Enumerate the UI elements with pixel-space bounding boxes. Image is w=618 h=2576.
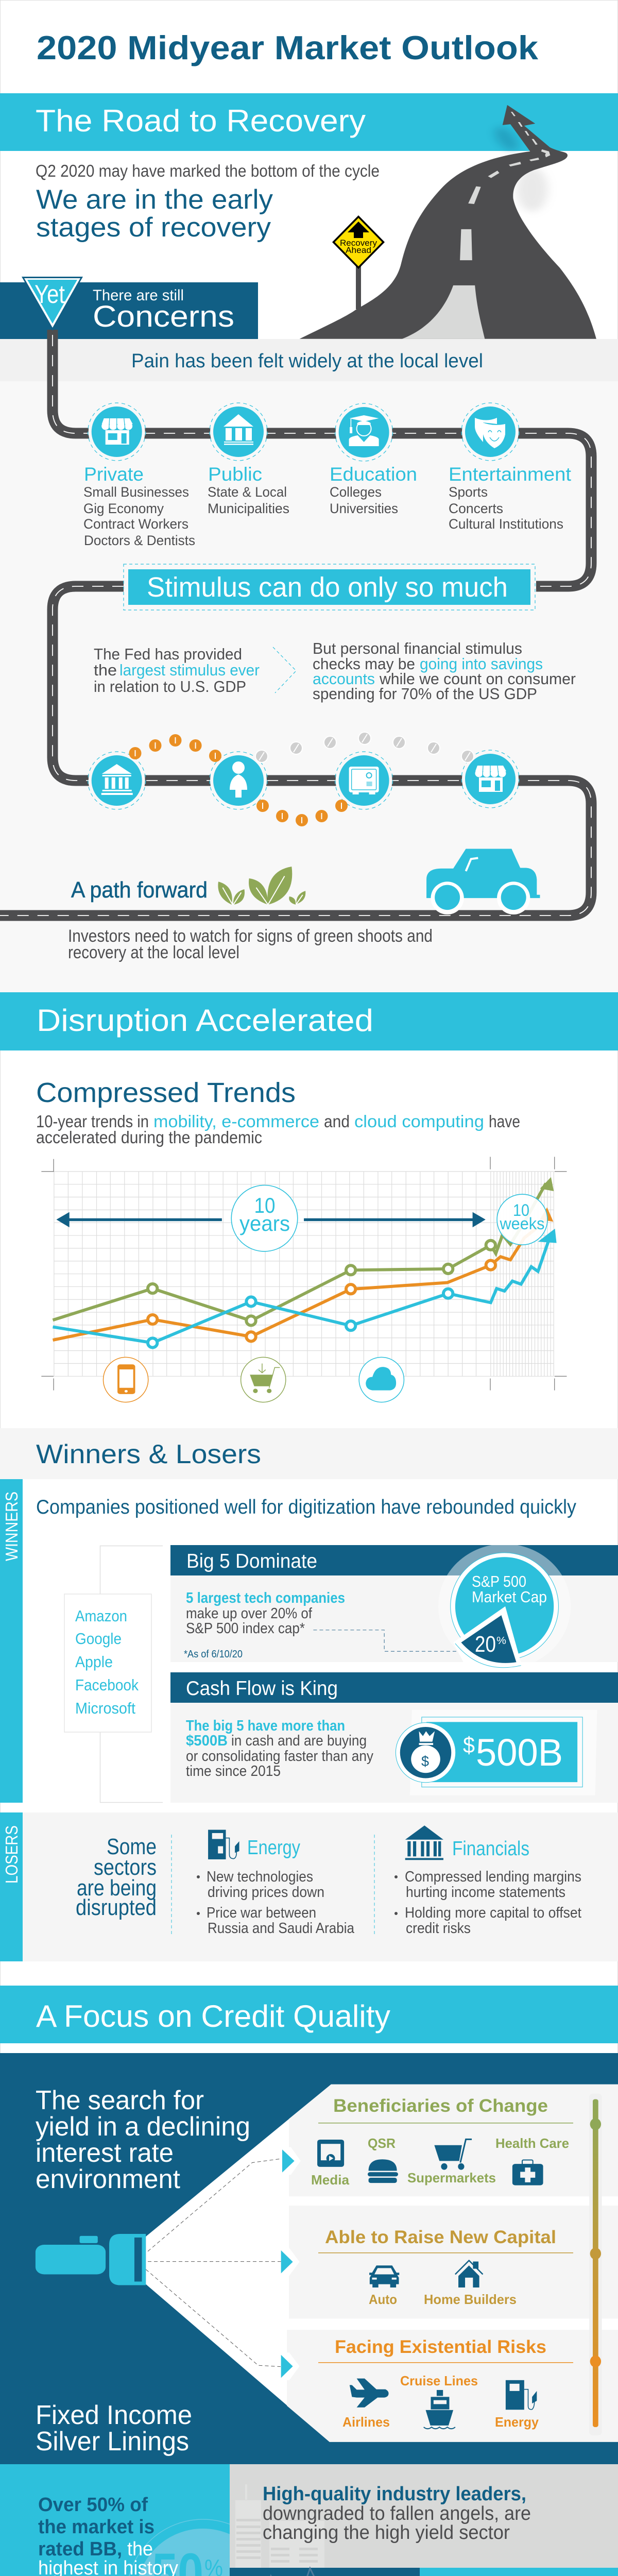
panel: big five company list: Google bbox=[75, 1630, 122, 1648]
icon: Recovery Ahead road sign: Ahead bbox=[346, 245, 371, 255]
heading: fixed income silver linings: Fixed Income bbox=[36, 2400, 192, 2430]
text: financials losers: Compressed lending margins bbox=[405, 1869, 581, 1885]
text: financials losers: credit risks bbox=[406, 1920, 471, 1937]
icon: green shoots bbox=[218, 867, 305, 905]
panel: Cash Flow is King bbox=[170, 1672, 618, 1803]
banner: stimulus can do only so much: Stimulus can do only so much bbox=[147, 572, 508, 603]
panel: treasury yields bbox=[230, 2568, 420, 2576]
illustration: road with arrow bbox=[300, 105, 596, 339]
panel: Big 5 Dominate: 5 largest tech companies bbox=[186, 1590, 345, 1606]
icons: media, burger, cart, health care bbox=[317, 2139, 543, 2185]
heading: a path forward: A path forward bbox=[71, 877, 208, 903]
icon: orange coins person to safe bbox=[256, 800, 348, 826]
heading: early stages of recovery: We are in the early bbox=[36, 184, 273, 215]
text: search for yield: interest rate bbox=[36, 2138, 174, 2168]
icon: mobility phone bbox=[104, 1357, 148, 1402]
panel text: facing existential risks: Cruise Lines bbox=[400, 2373, 478, 2388]
panel: over 50% rated BB: the bbox=[127, 2538, 153, 2560]
text: 10-year trends: cloud computing bbox=[354, 1112, 484, 1131]
text: investors need to watch: Investors need to watch for signs of green shoots and bbox=[68, 926, 433, 946]
chart: S&P 500 market cap pie bbox=[313, 1544, 571, 1669]
icon: bank circle bbox=[88, 752, 146, 809]
panel text: facing existential risks: Energy bbox=[495, 2414, 539, 2430]
icon: private store bbox=[88, 403, 146, 461]
callout: $500B with money bag: 500B bbox=[476, 1731, 563, 1774]
text: Entertainment: Concerts bbox=[449, 501, 503, 516]
text: 10-year trends: mobility, e-commerce bbox=[153, 1112, 319, 1131]
icon: gray crossed coins person to store bbox=[255, 732, 474, 762]
panel: high-quality industry leaders: changing the high yield sector bbox=[263, 2522, 510, 2544]
text: Private: Private bbox=[84, 464, 144, 485]
icon: education graduate bbox=[335, 403, 393, 461]
panel: falling dollar bbox=[420, 2568, 618, 2576]
panel: over 50% rated BB: rated BB, bbox=[38, 2538, 122, 2560]
text: personal financial stimulus: while we count on consumer bbox=[379, 670, 576, 688]
text: financials losers: Holding more capital to offset bbox=[405, 1905, 581, 1921]
text: Public bbox=[208, 464, 289, 516]
arrows: beam chevrons bbox=[281, 2147, 301, 2380]
heading: early stages of recovery: stages of recovery bbox=[36, 212, 271, 243]
text: some sectors are being disrupted: sectors bbox=[94, 1855, 157, 1880]
section band: A Focus on Credit Quality bbox=[0, 1986, 618, 2043]
chart series: orange bbox=[53, 1208, 553, 1340]
panel: Cash Flow is King: or consolidating faster than any bbox=[186, 1748, 373, 1765]
text: Private: Gig Economy bbox=[83, 501, 164, 516]
callout: $500B with money bag: $ bbox=[463, 1733, 475, 1758]
section band: The Road to Recovery: The Road to Recovery bbox=[36, 104, 366, 138]
panel background: Winners & Losers head bbox=[0, 1428, 618, 1479]
text: energy losers: New technologies bbox=[207, 1869, 313, 1885]
tab: LOSERS bbox=[0, 1812, 23, 1961]
panel: Big 5 Dominate: *As of 6/10/20 bbox=[184, 1649, 243, 1660]
label: 10 weeks: 10 bbox=[513, 1201, 529, 1219]
chart: S&P 500 market cap pie: Market Cap bbox=[472, 1588, 547, 1606]
panel: Big 5 Dominate: make up over 20% of bbox=[186, 1605, 313, 1622]
text: some sectors are being disrupted bbox=[76, 1834, 157, 1920]
section band: The Road to Recovery bbox=[0, 93, 618, 151]
text: the Fed stimulus: largest stimulus ever bbox=[119, 661, 260, 679]
text: Public: Public bbox=[208, 464, 262, 485]
text: search for yield bbox=[36, 2086, 250, 2194]
text: 10-year trends: and bbox=[324, 1112, 350, 1131]
panel: Big 5 Dominate: S&P 500 index cap* bbox=[186, 1620, 305, 1637]
text: Private: Small Businesses bbox=[83, 484, 189, 500]
banner: stimulus can do only so much bbox=[124, 564, 535, 610]
icon: flashlight bbox=[36, 2234, 146, 2285]
panel: big five company list: Amazon bbox=[75, 1607, 127, 1625]
icon: Recovery Ahead road sign bbox=[332, 215, 385, 309]
icon: entertainment masks bbox=[461, 403, 519, 461]
heading: Compressed Trends: Compressed Trends bbox=[36, 1077, 296, 1108]
text: some sectors are being disrupted: disrupted bbox=[76, 1895, 157, 1920]
text: personal financial stimulus bbox=[313, 639, 576, 703]
text: the Fed stimulus bbox=[94, 645, 260, 696]
panel: Cash Flow is King: The big 5 have more than bbox=[186, 1718, 345, 1734]
panel: losers background bbox=[0, 1812, 618, 1961]
title: 2020 Midyear Market Outlook bbox=[37, 29, 539, 66]
arrow: ten years span bbox=[56, 1212, 486, 1227]
text: search for yield: yield in a declining bbox=[36, 2112, 250, 2142]
text: pain felt widely: Pain has been felt widely at the local level bbox=[131, 350, 483, 372]
panel text: beneficiaries of change: Media bbox=[311, 2172, 350, 2188]
panel text: able to raise new capital: Able to Raise New Capital bbox=[325, 2227, 556, 2247]
text: energy losers bbox=[197, 1837, 355, 1937]
tab: WINNERS bbox=[0, 1479, 23, 1803]
panel text: beneficiaries of change: QSR bbox=[368, 2136, 396, 2151]
text: financials losers: Financials bbox=[452, 1838, 529, 1860]
text: Education: Education bbox=[330, 464, 417, 485]
text: energy losers: driving prices down bbox=[208, 1884, 324, 1901]
icon: store circle bbox=[461, 750, 519, 808]
panel text: beneficiaries of change: Supermarkets bbox=[407, 2170, 496, 2185]
text: some sectors are being disrupted: Some bbox=[107, 1834, 157, 1859]
text: energy losers: Price war between bbox=[207, 1905, 316, 1921]
heading: Winners & Losers: Winners & Losers bbox=[36, 1439, 261, 1469]
panel: over 50% rated BB: Over 50% of bbox=[38, 2494, 148, 2516]
text: some sectors are being disrupted: are being bbox=[77, 1875, 157, 1901]
label: 10 weeks: weeks bbox=[500, 1214, 545, 1233]
heading: fixed income silver linings bbox=[36, 2400, 192, 2456]
road: lower winding road bbox=[0, 586, 591, 916]
panel: Big 5 Dominate bbox=[170, 1545, 618, 1662]
chart series: green bbox=[53, 1177, 554, 1320]
text: 10-year trends bbox=[36, 1112, 520, 1147]
chart: S&P 500 market cap pie: S&P 500 bbox=[472, 1572, 526, 1590]
panel text: beneficiaries of change: Health Care bbox=[495, 2136, 569, 2151]
panel: high-quality industry leaders: downgraded to fallen angels, are bbox=[263, 2503, 531, 2524]
panel: Yet there are still concerns bbox=[0, 282, 258, 339]
panel: Big 5 Dominate: Big 5 Dominate bbox=[186, 1550, 317, 1572]
chart series: blue bbox=[53, 1229, 557, 1343]
panel text: facing existential risks: Airlines bbox=[342, 2414, 390, 2430]
chart: S&P 500 market cap pie: % bbox=[496, 1635, 506, 1647]
chart: S&P 500 market cap pie: 20 bbox=[475, 1632, 496, 1657]
icon: e-commerce cart bbox=[241, 1357, 286, 1402]
icon: safe circle bbox=[335, 752, 393, 809]
panel: high-quality industry leaders bbox=[230, 2464, 618, 2568]
callout: $500B with money bag: $ bbox=[421, 1753, 429, 1769]
text: 10-year trends: have bbox=[489, 1112, 520, 1131]
label: 10 years: years bbox=[239, 1211, 290, 1235]
line chart: compressed trends bbox=[41, 1157, 567, 1391]
panel text: able to raise new capital bbox=[318, 2227, 573, 2307]
section band: Disruption Accelerated bbox=[0, 992, 618, 1050]
gradient scale bar bbox=[589, 2094, 602, 2435]
icon: cloud computing bbox=[359, 1357, 404, 1402]
text: the Fed stimulus: The Fed has provided bbox=[94, 645, 242, 663]
text: companies positioned well: Companies positioned well for digitization have rebounded quickly bbox=[36, 1496, 576, 1518]
text: investors need to watch: recovery at the local level bbox=[68, 943, 239, 962]
panel: big five company list bbox=[64, 1594, 151, 1732]
arrow: dashed chevron bbox=[273, 647, 296, 693]
connector: winners bracket bbox=[100, 1546, 163, 1802]
panel: big five company list: Microsoft bbox=[75, 1699, 135, 1717]
panel text: facing existential risks bbox=[318, 2337, 573, 2430]
chart markers bbox=[148, 1241, 495, 1348]
text: 10-year trends: 10-year trends in bbox=[36, 1112, 149, 1131]
icon: orange coins bank to person bbox=[129, 734, 221, 762]
icon: Recovery Ahead road sign: Recovery bbox=[340, 238, 377, 248]
heading: fixed income silver linings: Silver Linings bbox=[36, 2427, 189, 2456]
text: personal financial stimulus: going into savings bbox=[420, 655, 543, 673]
panel: credit quality dark background bbox=[0, 2053, 618, 2464]
text: Education: Universities bbox=[330, 501, 398, 516]
icons: auto, home builders bbox=[369, 2261, 483, 2287]
tab: WINNERS: WINNERS bbox=[2, 1492, 21, 1561]
icon: financials bank bbox=[405, 1825, 443, 1860]
label: 10 years: 10 bbox=[254, 1193, 275, 1217]
text: Private: Doctors & Dentists bbox=[84, 533, 195, 548]
panel: big five company list: Facebook bbox=[75, 1676, 139, 1694]
panel text: able to raise new capital: Auto bbox=[369, 2292, 397, 2307]
text: Education: Colleges bbox=[330, 484, 382, 500]
text: Public: State & Local bbox=[208, 484, 287, 500]
section band: A Focus on Credit Quality: A Focus on Credit Quality bbox=[36, 1999, 390, 2033]
heading: early stages of recovery bbox=[36, 184, 273, 243]
panel: Yet there are still concerns: Concerns bbox=[93, 300, 234, 333]
text: Private bbox=[83, 464, 195, 548]
label: 10 years bbox=[239, 1193, 290, 1235]
text: financials losers: hurting income statements bbox=[406, 1884, 565, 1901]
icon: yet triangle sign bbox=[22, 277, 83, 331]
divider dashes: losers bbox=[171, 1835, 374, 1936]
text: Q2 2020 intro: Q2 2020 may have marked the bottom of the cycle bbox=[36, 161, 380, 180]
text: personal financial stimulus: spending for 70% of the US GDP bbox=[313, 685, 537, 703]
gray band: local pain bbox=[0, 339, 618, 381]
panel text: beneficiaries of change bbox=[311, 2096, 573, 2188]
text: Education bbox=[330, 464, 417, 516]
text: personal financial stimulus: checks may be bbox=[313, 655, 415, 673]
label: 10 weeks bbox=[500, 1201, 545, 1233]
section band: Disruption Accelerated: Disruption Accelerated bbox=[37, 1003, 373, 1038]
text: 10-year trends: accelerated during the pandemic bbox=[36, 1128, 262, 1147]
panel: Cash Flow is King: Cash Flow is King bbox=[186, 1677, 338, 1700]
text: energy losers: Russia and Saudi Arabia bbox=[208, 1920, 355, 1937]
text: Entertainment: Entertainment bbox=[449, 464, 572, 485]
panel: Cash Flow is King: time since 2015 bbox=[186, 1763, 281, 1780]
panel text: able to raise new capital: Home Builders bbox=[424, 2292, 517, 2307]
tab: LOSERS: LOSERS bbox=[2, 1825, 21, 1884]
panel text: facing existential risks: Facing Existential Risks bbox=[335, 2337, 546, 2357]
text: search for yield: The search for bbox=[36, 2086, 204, 2115]
icon: energy fuel pump bbox=[208, 1830, 239, 1859]
light gray section background bbox=[0, 381, 618, 992]
panel: high-quality industry leaders: High-quality industry leaders, bbox=[263, 2483, 526, 2505]
panel: over 50% rated BB bbox=[0, 2464, 230, 2576]
illustration: flashlight beam and panels bbox=[36, 2084, 618, 2442]
text: search for yield: environment bbox=[36, 2164, 181, 2194]
panel text: beneficiaries of change: Beneficiaries of Change bbox=[333, 2096, 548, 2116]
text: the Fed stimulus: the bbox=[94, 661, 117, 679]
text: personal financial stimulus: But personal financial stimulus bbox=[313, 639, 522, 657]
icon: yet triangle sign: Yet bbox=[35, 280, 65, 309]
panel: Yet there are still concerns: There are still bbox=[93, 287, 184, 304]
panel: Cash Flow is King: in cash and are buying bbox=[231, 1733, 367, 1749]
icon: person circle bbox=[210, 752, 267, 809]
text: Private: Contract Workers bbox=[83, 516, 188, 532]
icon: blue car bbox=[426, 849, 540, 914]
road: upper winding road bbox=[53, 330, 591, 586]
icons: airplane, ship, fuel pump bbox=[350, 2379, 537, 2429]
text: Public: Municipalities bbox=[208, 501, 289, 516]
text: Entertainment: Cultural Institutions bbox=[449, 516, 563, 532]
panel: over 50% rated BB: the market is bbox=[38, 2516, 154, 2538]
panel: Cash Flow is King: $500B bbox=[186, 1733, 228, 1749]
icon: public building bbox=[210, 403, 267, 461]
text: Entertainment bbox=[449, 464, 572, 532]
text: Entertainment: Sports bbox=[449, 484, 488, 500]
callout: $500B with money bag bbox=[396, 1710, 597, 1795]
text: investors need to watch bbox=[68, 926, 433, 962]
text: energy losers: Energy bbox=[247, 1837, 300, 1859]
text: personal financial stimulus: accounts bbox=[313, 670, 375, 688]
text: financials losers bbox=[394, 1838, 581, 1937]
text: the Fed stimulus: in relation to U.S. GDP bbox=[94, 677, 246, 696]
panel: big five company list: Apple bbox=[75, 1653, 113, 1671]
